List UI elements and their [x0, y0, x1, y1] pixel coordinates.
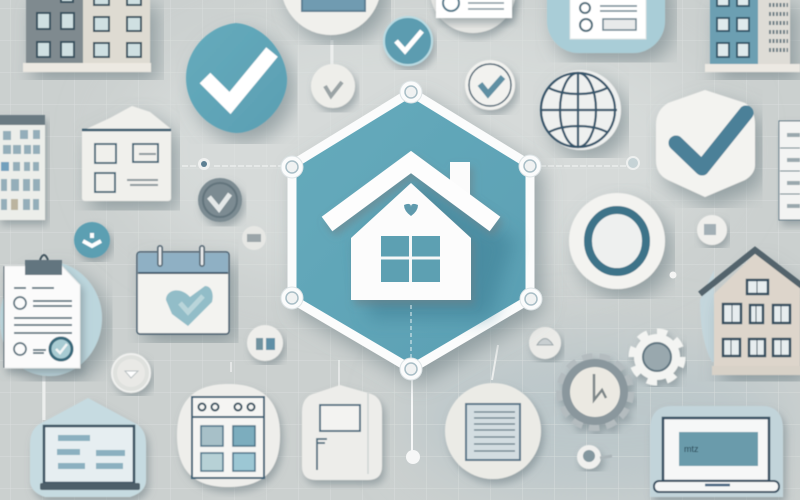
- icon: top-left apartment building: [23, 0, 151, 72]
- icon: ring on white circle: [569, 193, 665, 289]
- house icon: [327, 162, 495, 300]
- end dot of axis: [406, 450, 420, 464]
- icon: clock gear: [560, 357, 630, 427]
- icon: clipboard checklist: [0, 255, 102, 376]
- hexagon panel: [292, 92, 530, 369]
- icon: small white seal: [311, 64, 355, 108]
- icon: teal rounded block with form: [547, 0, 665, 53]
- icon: small key badge: [577, 445, 612, 469]
- icon: laptop on pale hexagon: [30, 398, 146, 497]
- icon: top-right building: [705, 0, 800, 72]
- icon: small gray dot badge: [242, 226, 266, 250]
- small decorative dot: [670, 272, 676, 278]
- icon: small dome badge: [529, 327, 561, 359]
- icon: dark gray seal: [198, 178, 242, 222]
- dotted axis: [410, 305, 412, 360]
- icon: white hexagon with blue check: [656, 90, 755, 197]
- icon: check in white ring: [465, 60, 515, 110]
- connector node: left dot: [198, 158, 210, 170]
- main hexagon with house: [281, 81, 542, 380]
- icon: right edge form: [779, 121, 800, 220]
- icon: right house: [700, 250, 800, 375]
- icon: control panel: [177, 384, 280, 487]
- icon: window layout card: [82, 106, 171, 201]
- icon: top centre document circle: [281, 0, 381, 35]
- icon: right laptop: [650, 406, 783, 497]
- connector lines: [44, 40, 626, 452]
- icon: calendar with heart check: [137, 248, 229, 334]
- icon: white cog: [632, 332, 682, 382]
- icon: small teal check circle: [384, 17, 432, 65]
- icon: small teal person circle: [74, 222, 110, 258]
- corner nodes: [281, 81, 542, 380]
- icon: door: [302, 385, 382, 480]
- icon: globe: [541, 70, 621, 150]
- house shadow: [358, 180, 515, 318]
- icon: small right seal: [697, 215, 727, 245]
- connector node: right ring: [627, 157, 639, 169]
- icon: top checklist paper on circle: [430, 0, 516, 33]
- icon: small heart circle: [112, 354, 150, 392]
- icon: table on circle: [445, 383, 541, 479]
- icon: teal check badge: [186, 23, 287, 133]
- laptop screen text: mtz: [684, 444, 699, 454]
- icon: left calendar panel: [0, 115, 45, 220]
- icon: small document badge: [247, 325, 283, 361]
